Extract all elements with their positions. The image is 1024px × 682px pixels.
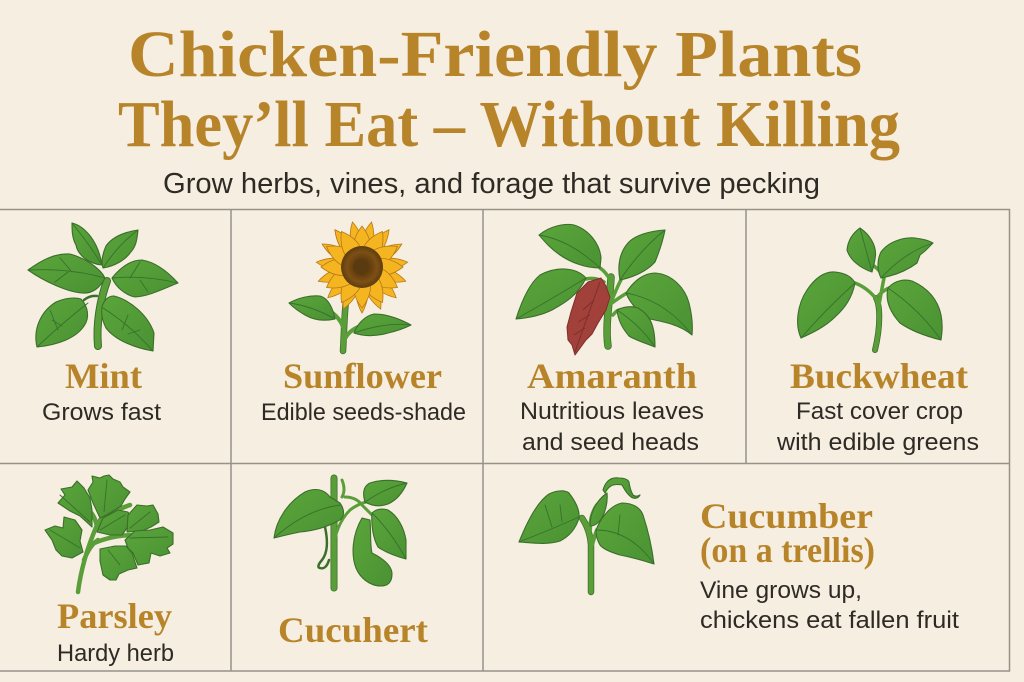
description: Fast cover crop with edible greens: with edible greens [776, 429, 979, 456]
title: Chicken-Friendly Plants [128, 18, 862, 91]
description: Vine grows up, chickens eat fallen fruit: Vine grows up, [700, 577, 862, 604]
subtitle: Grow herbs, vines, and forage that survive pecking [163, 168, 820, 200]
label: Cucuhert: Cucuhert [278, 610, 428, 650]
icon: mint plant [28, 223, 178, 351]
description: Nutritious leaves and seed heads: Nutritious leaves [520, 398, 704, 425]
icon: amaranth plant [516, 224, 692, 355]
description: Fast cover crop with edible greens: Fast cover crop [796, 398, 963, 425]
label: Parsley: Parsley [57, 596, 172, 636]
panel: mint [28, 223, 178, 426]
label: Cucumber (on a trellis): (on a trellis) [700, 530, 875, 570]
description: Nutritious leaves and seed heads [520, 398, 704, 456]
label: Mint: Mint [65, 356, 142, 396]
label: Sunflower: Sunflower [283, 356, 442, 396]
panel: buckwheat [776, 228, 979, 456]
description: Nutritious leaves and seed heads: and seed heads [522, 429, 699, 456]
panel: sunflower [261, 221, 466, 426]
panel: amaranth [516, 224, 704, 456]
description: Fast cover crop with edible greens [776, 398, 979, 456]
label: Buckwheat: Buckwheat [790, 356, 968, 396]
panel: cucumber on a trellis [519, 478, 959, 634]
description: Edible seeds-shade: Edible seeds-shade [261, 399, 466, 426]
description: Vine grows up, chickens eat fallen fruit: chickens eat fallen fruit [700, 607, 959, 634]
icon: sunflower plant [289, 221, 411, 351]
icon: buckwheat plant [798, 228, 942, 350]
label: Amaranth: Amaranth [527, 356, 697, 396]
panel: parsley [45, 475, 174, 667]
icon: cucumber vine with fruit [274, 478, 407, 588]
icon: parsley plant [45, 475, 173, 592]
label: Cucumber (on a trellis) [700, 496, 875, 570]
description: Vine grows up, chickens eat fallen fruit [700, 577, 959, 634]
description: Grows fast: Grows fast [42, 399, 161, 426]
icon: cucumber seedling [519, 478, 654, 592]
grid of plant panels [0, 210, 1010, 671]
description: Hardy herb: Hardy herb [57, 640, 174, 667]
label: Cucumber (on a trellis): Cucumber [700, 496, 873, 536]
panel: cucuhert [274, 478, 428, 650]
title [118, 18, 900, 161]
title: They’ll Eat – Without Killing [118, 88, 900, 161]
